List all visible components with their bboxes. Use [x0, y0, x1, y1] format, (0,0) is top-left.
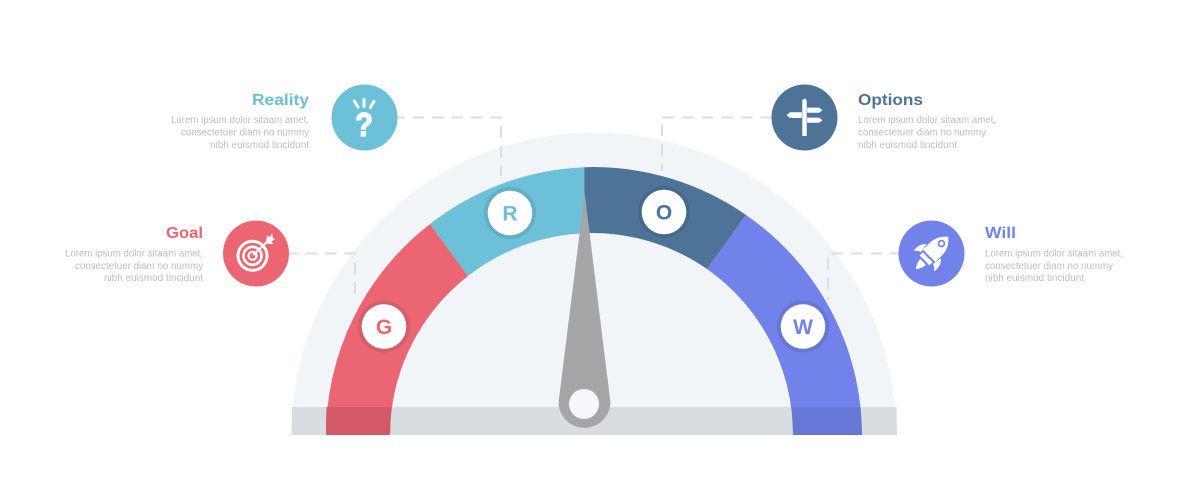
badge: G: G: [376, 316, 392, 339]
text block: Will: [985, 225, 1123, 284]
badge: G: [358, 300, 410, 352]
base band overlay on blue: [792, 407, 862, 435]
gauge segment: O dark blue: [584, 167, 746, 269]
gauge base band: [292, 407, 897, 435]
icon: target with arrow (Goal): [223, 220, 289, 286]
text block: Will: consectetuer diam no nummy: [985, 261, 1113, 272]
text block: Goal: Lorem ipsum dolor sitaam amet,: [65, 248, 203, 260]
connector: Goal: [286, 254, 355, 296]
text block: Options: Lorem ipsum dolor sitaam amet,: [858, 115, 996, 126]
text block: Goal: Goal: [166, 225, 203, 242]
connector: Options: [662, 118, 772, 171]
needle: [559, 193, 610, 428]
text block: Reality: Lorem ipsum dolor sitaam amet,: [171, 115, 309, 126]
badge: W: [777, 300, 829, 352]
icon: question mark with rays (Reality): ?: [355, 106, 373, 143]
text block: Reality: [171, 92, 309, 151]
text block: Will: nibh euismod tincidunt: [985, 273, 1084, 284]
badge: R: [484, 187, 536, 239]
badge: W: W: [793, 316, 813, 339]
text block: Options: [858, 92, 996, 151]
text block: Goal: [65, 225, 203, 284]
text block: Reality: nibh euismod tincidunt: [210, 140, 309, 151]
gauge segment: R teal: [430, 167, 584, 276]
text block: Options: nibh euismod tincidunt: [858, 140, 957, 151]
badge: O: [638, 186, 690, 238]
text block: Options: consectetuer diam no nummy: [858, 128, 986, 138]
text block: Options: Options: [858, 92, 923, 109]
needle hub: [569, 389, 599, 419]
text block: Will: Lorem ipsum dolor sitaam amet,: [985, 248, 1123, 260]
badge: R: R: [502, 202, 518, 226]
connector: Will: [828, 254, 902, 300]
badge: O: O: [656, 202, 672, 224]
icon: rocket (Will): [898, 220, 964, 286]
text block: Goal: nibh euismod tincidunt: [104, 273, 203, 284]
gauge segment: W periwinkle: [707, 215, 862, 435]
connector: Reality: [393, 118, 501, 176]
text block: Reality: consectetuer diam no nummy: [181, 128, 309, 138]
icon: signpost (Options): [772, 84, 838, 150]
text block: Will: Will: [985, 225, 1016, 242]
text block: Goal: consectetuer diam no nummy: [75, 261, 203, 272]
text block: Reality: Reality: [252, 92, 309, 109]
icon: question mark with rays (Reality): [332, 84, 398, 150]
gauge segment: G red: [326, 224, 468, 435]
gauge background semicircle: [292, 132, 896, 435]
base band overlay on red: [326, 407, 392, 435]
